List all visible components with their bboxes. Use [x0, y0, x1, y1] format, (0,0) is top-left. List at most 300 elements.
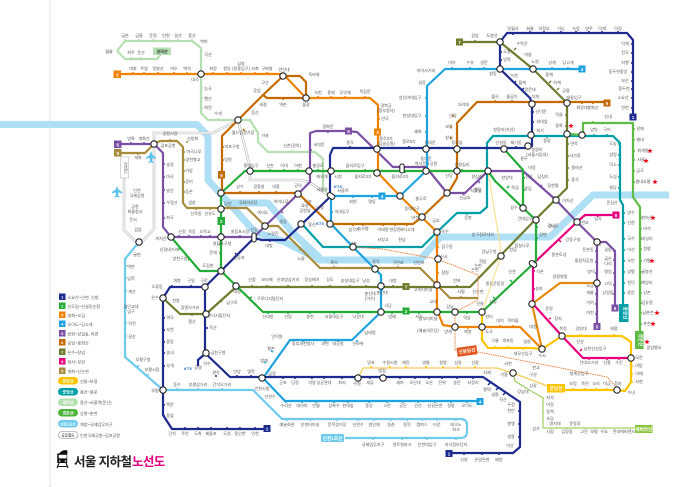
line 1 navy: 대방 — [265, 242, 273, 248]
badge: line 8 — [612, 212, 620, 218]
line 1 navy: 인천 — [251, 430, 259, 436]
line 1 navy: 오류동 — [151, 284, 163, 289]
legend pill Bundang — [58, 377, 98, 384]
line: Incheon 1: 예술회관 — [279, 421, 295, 427]
line 1 navy: 월계 — [518, 79, 526, 85]
line 6 brown: 삼각지 — [348, 226, 360, 232]
legend pill Bundang: 선릉~보정 — [80, 378, 98, 384]
line: Everline: 보평 — [590, 428, 598, 434]
line 9 gold: 신반포 — [413, 259, 425, 265]
line 7 olive: 철산 — [188, 318, 196, 324]
line 3 orange: 학여울 — [507, 317, 519, 323]
line 1 navy: (서울시립대) — [526, 151, 548, 157]
line 3 orange: 을지로3가 — [354, 173, 372, 179]
badge: line 4 center — [378, 192, 386, 200]
line 2 green: 양천구청 — [172, 255, 188, 261]
line 4 sky blue: 공단 — [399, 402, 407, 408]
line: Jungang teal: 도농 — [609, 140, 617, 146]
line 3 orange: 지축 — [251, 65, 259, 71]
line 1 navy: 당정 — [291, 379, 299, 385]
line 7 olive: 고속터미널 — [414, 286, 433, 292]
line 5 purple: 개롱 — [586, 289, 594, 295]
label: Shinbundang line — [456, 345, 478, 357]
line 3 orange: 충무로 — [415, 195, 427, 201]
line: Incheon 1: 동막 — [403, 421, 411, 427]
legend — [58, 294, 120, 438]
label: airport railroad stations: 공항 — [131, 203, 139, 209]
line 7 olive: 대림 — [233, 288, 241, 294]
line: Shinbundang orange dashed: 논현 — [474, 262, 482, 268]
line 1 navy: 성균관대 — [316, 379, 332, 385]
line 1 navy: 소요산 — [617, 94, 629, 100]
line: Incheon 1: 계산 — [128, 288, 136, 294]
line 1 navy: 도원 — [223, 430, 231, 436]
icon: KTX marks: KTX — [316, 221, 324, 226]
line 3 orange: 양재 — [444, 328, 452, 334]
line 1 navy: 덕계 — [621, 40, 629, 46]
line 1 navy: 남영 — [316, 204, 324, 210]
line 3 orange: 일원 — [523, 338, 531, 344]
line 9 gold: 사평 — [457, 288, 465, 294]
line 7 olive: 강남구청 — [481, 248, 497, 254]
line 1 navy: 동대문 — [424, 139, 436, 145]
line 5 purple: 명일 — [604, 268, 612, 274]
badge: line 7 north: 7 — [458, 40, 461, 45]
line 1 navy: 직산 — [499, 396, 507, 402]
badge: line 2: 2 — [220, 219, 223, 224]
line 7 olive: 마들 — [524, 51, 532, 57]
line 7 olive: 숭실대입구 — [341, 277, 360, 283]
line: Bundang yellow: 미금 — [603, 380, 611, 386]
line 6 brown: 돌곶이 — [506, 93, 518, 99]
line 3 orange: (원흥입구) — [232, 65, 251, 71]
line 6 brown: 보문 — [445, 124, 453, 129]
line 6 brown: 불광 — [302, 101, 310, 107]
line 1 navy: 부천 — [166, 326, 174, 332]
title: 서울 지하철 — [74, 455, 131, 469]
line 2 green: 뚝섬 — [511, 184, 519, 190]
line 5 purple: 둔촌동 — [582, 246, 594, 252]
line 7 olive: 보라매 — [261, 276, 273, 282]
line 5 purple: 행당 — [474, 186, 482, 192]
line 5 purple: 다리 — [604, 260, 612, 266]
line 3 orange: 구파발 — [261, 65, 273, 71]
legend pill Incheon — [58, 420, 113, 428]
line 5 purple: 신금호 — [459, 194, 471, 200]
legend pill Gyeongchun: 상봉~춘천 — [80, 410, 98, 416]
line 3 orange: 옥수 — [441, 228, 449, 234]
river: Han river — [0, 124, 669, 260]
legend row 4: 오이도~당고개 — [68, 321, 93, 327]
line: Gyeongui pale green: 행신 — [204, 95, 212, 101]
line: Bundang yellow: 보정 — [569, 380, 577, 386]
line: Everline: 강남대 — [517, 388, 529, 394]
line 9 gold: 국회의사당 — [239, 199, 258, 205]
line 4 sky blue: 반월 — [312, 402, 320, 408]
line: Jungang teal: 양정 — [609, 151, 617, 157]
line 1 navy: 관악 — [212, 369, 220, 375]
line 8 pink: 단대오거리 — [580, 359, 599, 365]
line 2 green: 건대입구 — [517, 215, 533, 221]
line: Jungang teal: 양원 — [590, 126, 598, 132]
line 5 purple: 오금 — [586, 283, 594, 288]
line 5 purple: 굽은 — [604, 256, 612, 261]
line 5 purple: 마천 — [586, 309, 594, 315]
line 1 navy: 세마 — [396, 379, 404, 385]
line 5 purple: 목동 — [188, 229, 196, 234]
line: Jungang teal: 운길산 — [606, 199, 618, 205]
line 5 purple: 마곡 — [166, 173, 174, 179]
label: airport railroad stations: 운서 — [129, 216, 137, 222]
line 3 orange: 매봉 — [464, 328, 472, 334]
line 1 navy: 서울역 — [316, 186, 328, 192]
line: Incheon 1: 부평구청 — [135, 356, 151, 362]
line 1 navy: 도화 — [194, 430, 202, 436]
line: Everline: 시청 — [546, 428, 554, 434]
badge: line 4 north: 4 — [581, 67, 584, 72]
icon: airplane south — [112, 186, 122, 198]
line 1 navy: 녹천 — [510, 72, 518, 78]
line 7 olive: 사가정 — [569, 152, 581, 158]
line: Bundang yellow: 서천 — [504, 360, 512, 366]
icons: red stars: ★ — [644, 339, 650, 346]
line 1 navy: 덕계 — [598, 25, 606, 31]
legend pill Airport — [58, 432, 120, 438]
line 7 olive: 논현 — [471, 266, 479, 272]
line 6 brown: 월드컵경기장 — [232, 129, 255, 135]
line 1 navy: 서울역 — [337, 187, 349, 193]
line 2 green: 문래 — [209, 249, 217, 255]
line 9 gold: 당산 — [224, 200, 232, 206]
line: Incheon 1: 문학경기장 — [328, 421, 347, 427]
line 2 green: 제기동 — [510, 139, 522, 145]
label: Shinbundang line: 신분당선 — [458, 346, 476, 355]
line: Bundang yellow: 구룡 — [491, 337, 499, 343]
line 9 gold: 노들 — [297, 255, 305, 261]
line 6 brown: 한강진 — [389, 226, 401, 232]
line 1 navy: 부평 — [151, 387, 159, 393]
line: Jungang teal: 신원 — [627, 219, 635, 225]
line 1 navy: 중동 — [166, 339, 174, 344]
line 4 sky blue: 창동 — [489, 70, 497, 76]
line 9 gold — [114, 130, 484, 298]
line: Incheon 1: 인천시청 — [254, 385, 270, 391]
line 1 navy: 도봉 — [503, 48, 511, 54]
line: Bundang yellow: 매탄 — [402, 359, 410, 365]
line 7 olive: 총신대 — [364, 290, 376, 296]
line 5 purple: 상일동 — [602, 289, 614, 295]
line 2 green: 역삼 — [463, 314, 471, 320]
line 8 pink: 석촌 — [536, 268, 544, 274]
line 3 orange: 독립문 — [359, 88, 371, 94]
badge: line 6: 6 — [220, 173, 223, 178]
line 5 purple: 고덕 — [604, 280, 612, 286]
line 3 orange: 연신내 — [278, 66, 290, 72]
legend pill Gyeongui: 용산~서울역(문산) — [80, 399, 112, 405]
line 6 brown: 월곡 — [491, 93, 499, 99]
line: Bundang yellow: 이매 — [635, 370, 643, 376]
line 1 navy: 세류 — [366, 379, 374, 385]
line 2 green: 신천 — [508, 268, 516, 274]
line 5 purple: 광화문 — [322, 123, 334, 129]
line 3 orange: 무악재 — [339, 89, 351, 95]
line 2 green: 홍대입구 — [243, 162, 259, 168]
line 1 navy: 연천 — [621, 104, 629, 110]
line 9 gold: 동작 — [372, 258, 380, 264]
line: Everline: 삼가 — [532, 425, 540, 431]
line: Jungang teal: 양수 — [627, 209, 635, 215]
line: Gyeongchun green: 마석 — [643, 225, 651, 231]
line 3 orange: 종로3가 — [379, 135, 393, 141]
legend row 5 — [59, 330, 99, 336]
icons: red stars: ★ — [568, 123, 574, 130]
line 9 gold: 가양 — [185, 167, 193, 173]
line: Incheon 1: 부평시장 — [144, 366, 160, 372]
line: Everline: 수요 — [600, 428, 608, 434]
label: airport railroad stations: 화물청사 — [127, 208, 143, 214]
line: Jungang teal: 덕소 — [609, 161, 617, 167]
line 6 brown: 대흥 — [272, 183, 280, 189]
line 5 purple: 방화 — [127, 135, 135, 141]
line 5 purple: 송정 — [166, 161, 174, 167]
icons: red stars: ★ — [649, 258, 655, 265]
line: Incheon 1: 파크 — [452, 426, 460, 432]
line 8 pink: 신흥 — [603, 359, 611, 365]
line 1 navy: 진위 — [438, 379, 446, 385]
badge: line 5 south — [594, 323, 600, 330]
line 6 brown: 녹사평 — [357, 225, 369, 231]
line: Gyeongui pale green: 신촌(경의) — [283, 142, 302, 148]
line 5 purple: 방이 — [587, 268, 595, 274]
line 6 brown: 고려대 — [457, 101, 469, 107]
line: Incheon 1: 테크노 — [450, 421, 462, 427]
line 4 sky blue: 오이도 — [461, 402, 473, 408]
line 3 orange: 마두 — [170, 65, 178, 71]
line 4 sky blue: 대야미 — [296, 402, 308, 408]
line 7 olive: 남구로 — [226, 299, 238, 305]
line 5 purple: 까치산 — [155, 235, 167, 241]
badge: line 2 — [218, 217, 225, 225]
line 2 green: 충정로 — [312, 162, 324, 168]
line 1 navy: 종각 — [346, 139, 354, 145]
badge: line 2 south — [402, 308, 410, 314]
line: Bundang yellow: 상갈 — [454, 359, 462, 365]
line: Everline: 고진 — [580, 428, 588, 434]
legend row 8: 암사~모란 — [68, 358, 85, 364]
legend row 7: 7 — [61, 350, 64, 355]
line 1 navy: 신창 — [460, 456, 468, 462]
legend pill Bundang: 분당선 — [62, 378, 74, 384]
legend pill Incheon: 인천1호선 — [60, 422, 76, 426]
line: Gyeongchun green — [567, 113, 662, 350]
line: Incheon 1: 센트럴파크 — [393, 441, 412, 447]
icon: train — [57, 450, 68, 468]
line 1 navy: 두정 — [507, 401, 515, 407]
line: Gyeongui pale green: 화전 — [204, 104, 212, 110]
line 3 orange: 주엽 — [140, 65, 148, 71]
line 4 sky blue: 범계 — [260, 357, 268, 363]
line 9 gold: 등촌 — [185, 188, 193, 194]
line: Bundang yellow: 수원시청 — [382, 359, 398, 365]
line 4 sky blue: 총신대 — [376, 289, 388, 295]
line: Everline: 동백 — [546, 408, 554, 414]
line: Everline: 어정 — [546, 401, 554, 407]
line 2 green: 서울대입구 — [325, 313, 344, 319]
line 7 olive: 광명사거리 — [181, 304, 200, 310]
line 5 purple: 올림픽공원 — [575, 257, 594, 263]
line 3 orange: 신사 — [440, 253, 448, 259]
line: Gyeongchun green: 백양리 — [641, 279, 653, 285]
line 2 green: 이대 — [280, 162, 288, 168]
line 1 navy: 안양 — [233, 368, 241, 374]
badge: line 7 south — [402, 283, 410, 290]
line: Gyeongchun green: 남춘천 — [642, 309, 654, 315]
line 7 olive: 용마산 — [571, 164, 583, 170]
line: Gyeongui pale green: 월롱 — [105, 48, 113, 54]
legend pill Jungang: 중앙선 — [62, 388, 74, 394]
line 5 purple: 김포공항 — [160, 142, 176, 148]
line 3 orange: (탑골공원) — [377, 140, 396, 146]
line 1 navy: 석계 — [531, 93, 539, 99]
legend pill Gyeongchun — [58, 409, 98, 416]
line: Incheon 1: 원인재 — [368, 421, 380, 427]
line 5 purple: 길동 — [604, 246, 612, 252]
line 9 gold: 염창 — [188, 199, 196, 205]
line 7 olive: 장암 — [471, 32, 479, 38]
badge: line 3 west — [114, 70, 121, 78]
line 5 purple: 거여 — [586, 299, 594, 305]
line: Bundang yellow: 정자 — [614, 380, 622, 386]
line 8 pink: 복정 — [559, 325, 567, 331]
line 8 pink: 산성 — [576, 338, 584, 344]
line 4 sky blue: 평촌 — [267, 345, 275, 351]
legend row 3: 대화~오금 — [68, 312, 85, 318]
line 5 purple: 마포 — [304, 198, 312, 204]
line 6 brown: 망원 — [224, 156, 232, 162]
line 1 navy: 송내 — [166, 349, 174, 355]
line 4 sky blue: 미아 — [448, 59, 456, 65]
line 2 green: 신대방 — [262, 313, 274, 319]
line 2 green: 잠실나루 — [514, 242, 530, 248]
line 2 green: 신촌 — [266, 162, 274, 168]
line 5 purple: 동대문 — [420, 155, 432, 161]
badge: line 5 east: 5 — [614, 306, 617, 311]
line 3 orange: 동대입구 — [404, 205, 420, 211]
line 5 purple: 우장산 — [166, 199, 178, 205]
line 5 purple: 오목교 — [199, 229, 211, 234]
line 4 sky blue: 정왕 — [447, 402, 455, 408]
line 1 navy: 용산 — [308, 221, 316, 227]
line 1 navy: 방학 — [503, 56, 511, 62]
line 3 orange: 화정 — [209, 65, 217, 71]
line: Jungang teal: 청량리(지선) — [493, 126, 515, 132]
line 1 navy: 의정부 — [538, 25, 550, 31]
line 1 navy: 신이문 — [535, 108, 547, 114]
line: Incheon 1: 경인교대 — [123, 303, 139, 309]
line 1 navy: 청량리 — [531, 146, 543, 152]
label: Gyeongui line — [153, 48, 171, 55]
line 3 orange: 홍제 — [327, 89, 335, 95]
line: airport railroad — [124, 120, 331, 245]
line 3 orange: 녹번 — [314, 89, 322, 95]
line 1 navy: 쌍용 — [507, 433, 515, 439]
line: Jungang teal: 아신 — [627, 246, 635, 252]
line 7 olive: 신대방삼거리 — [277, 276, 300, 282]
line 7 olive: 공릉 — [562, 87, 570, 93]
line: Bundang yellow: 태평 — [610, 325, 618, 331]
line 2 green: 신정네거리 — [160, 246, 179, 252]
line 1 navy: 송탄 — [453, 379, 461, 385]
line 8 pink: 천호 — [581, 219, 589, 225]
badge: line 5 top — [345, 128, 352, 134]
line: Incheon 1: 입구 — [127, 308, 135, 314]
line 6 brown: 태릉입구 — [566, 94, 582, 100]
line 4 sky blue: 고잔 — [383, 402, 391, 408]
line 1 navy: 망월사 — [507, 25, 519, 31]
line 1 navy: 구로 — [200, 278, 208, 283]
line: Everline: 전대에버랜드 — [613, 428, 636, 434]
line 9 gold: 양천향교 — [185, 156, 201, 162]
line 9 gold: 신목동 — [190, 210, 202, 216]
legend pill Jungang — [58, 388, 98, 396]
line: Incheon 1: 신연수 — [352, 421, 364, 427]
line 1 navy: 천안 — [507, 407, 515, 413]
line 2 green: 상왕십리 — [454, 161, 470, 167]
legend row 9 — [59, 368, 89, 374]
line: Bundang yellow: 압구정로데오 — [472, 231, 495, 237]
badge: line 1 north: 1 — [632, 115, 635, 120]
line 1 navy: 동두천 — [618, 85, 630, 91]
line 1 navy: 제물포 — [205, 430, 217, 436]
line: Incheon 1: 동수 — [173, 381, 181, 387]
line: Bundang yellow — [358, 171, 643, 395]
line: Bundang yellow: 영통 — [422, 359, 430, 365]
line 6 brown: 창신 — [445, 134, 453, 140]
icons: red stars — [568, 123, 660, 346]
line 2 green: 강남 — [446, 303, 454, 309]
line 1 navy: 외대앞 — [536, 118, 548, 124]
line 7 olive: 장승배기 — [304, 276, 320, 282]
line: Bundang yellow: 오리 — [592, 380, 600, 386]
line 9 gold: 증미 — [185, 178, 193, 184]
line 5 purple: 을지로4가 — [391, 173, 409, 179]
badge: line 4 north — [578, 66, 586, 72]
line: Gyeongchun green: 가평 — [643, 257, 651, 263]
line 7 olive: 내방 — [389, 277, 397, 283]
line: Gyeongchun green: 청평 — [643, 245, 651, 251]
line 7 olive: 신풍 — [248, 276, 256, 282]
legend pill Gyeongchun: 경춘선 — [62, 410, 74, 416]
line: Bundang yellow: 야탑 — [635, 362, 643, 368]
line 2 green: 신설동 — [495, 139, 507, 145]
line 1 navy: 영등포 — [233, 254, 245, 260]
legend row 3: 3 — [61, 313, 64, 318]
line 2 green: 한양대 — [501, 174, 513, 180]
line 6 brown: 봉화산 — [587, 104, 599, 110]
line 4 sky blue: 대공원 — [332, 340, 344, 346]
label: airport railroad stations: 인천 — [133, 187, 141, 193]
line 1 navy: 배방 — [495, 456, 503, 462]
legend row 4 — [59, 320, 93, 327]
line 1 navy: 오산대 — [409, 379, 421, 385]
line 2 green: 왕십리 — [471, 173, 483, 179]
line: Everline: 운동장 — [569, 420, 581, 426]
line: Jungang teal: 오빈 — [627, 257, 635, 263]
line 4 sky blue: 선바위 — [352, 340, 364, 346]
label: Bundang line — [547, 384, 565, 392]
line 1 navy: 의왕 — [308, 379, 316, 385]
line 1 navy: 성환 — [491, 391, 499, 397]
